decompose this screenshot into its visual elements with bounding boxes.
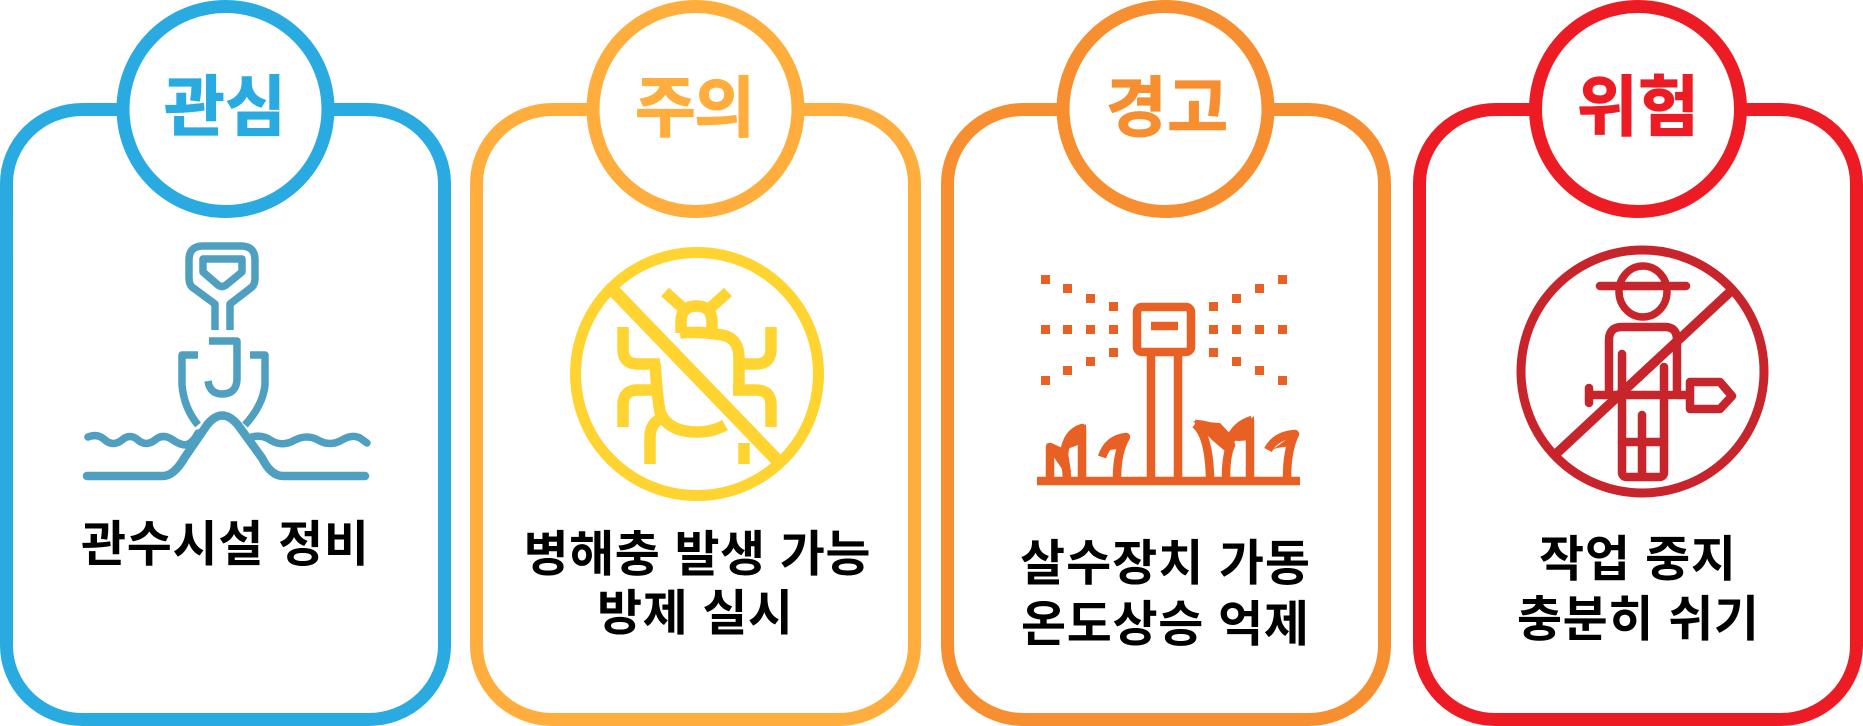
panel: 관심 <box>6 6 444 720</box>
description: 살수장치 가동 <box>1020 537 1310 591</box>
description: 관수시설 정비 <box>81 518 369 572</box>
heading: 관심 <box>164 70 286 144</box>
panel: 경고 <box>948 6 1384 720</box>
heading: 경고 <box>1106 71 1228 145</box>
card frame <box>948 110 1384 720</box>
description: 작업 중지 <box>1539 533 1736 587</box>
icon: no bugs <box>576 252 818 496</box>
card frame <box>1420 110 1856 720</box>
description <box>1020 537 1310 652</box>
heading circle <box>593 6 798 212</box>
icon: sprinkler <box>1037 275 1300 481</box>
description <box>524 528 870 641</box>
heading circle <box>123 6 328 212</box>
heading: 위험 <box>1577 70 1699 144</box>
heading circle <box>1063 6 1268 212</box>
icon: shovel in soil <box>87 246 367 476</box>
description: 병해충 발생 가능 <box>524 528 870 582</box>
heading circle <box>1536 6 1740 212</box>
card frame <box>6 110 444 720</box>
panel: 위험 <box>1420 6 1856 720</box>
icon: stop working farmer <box>1521 250 1764 493</box>
description: 충분히 쉬기 <box>1517 593 1759 647</box>
description: 온도상승 억제 <box>1021 598 1309 652</box>
card frame <box>476 110 914 720</box>
heading: 주의 <box>635 71 755 145</box>
description: 방제 실시 <box>597 587 793 641</box>
description <box>1517 533 1759 647</box>
panel: 주의 <box>476 6 914 720</box>
